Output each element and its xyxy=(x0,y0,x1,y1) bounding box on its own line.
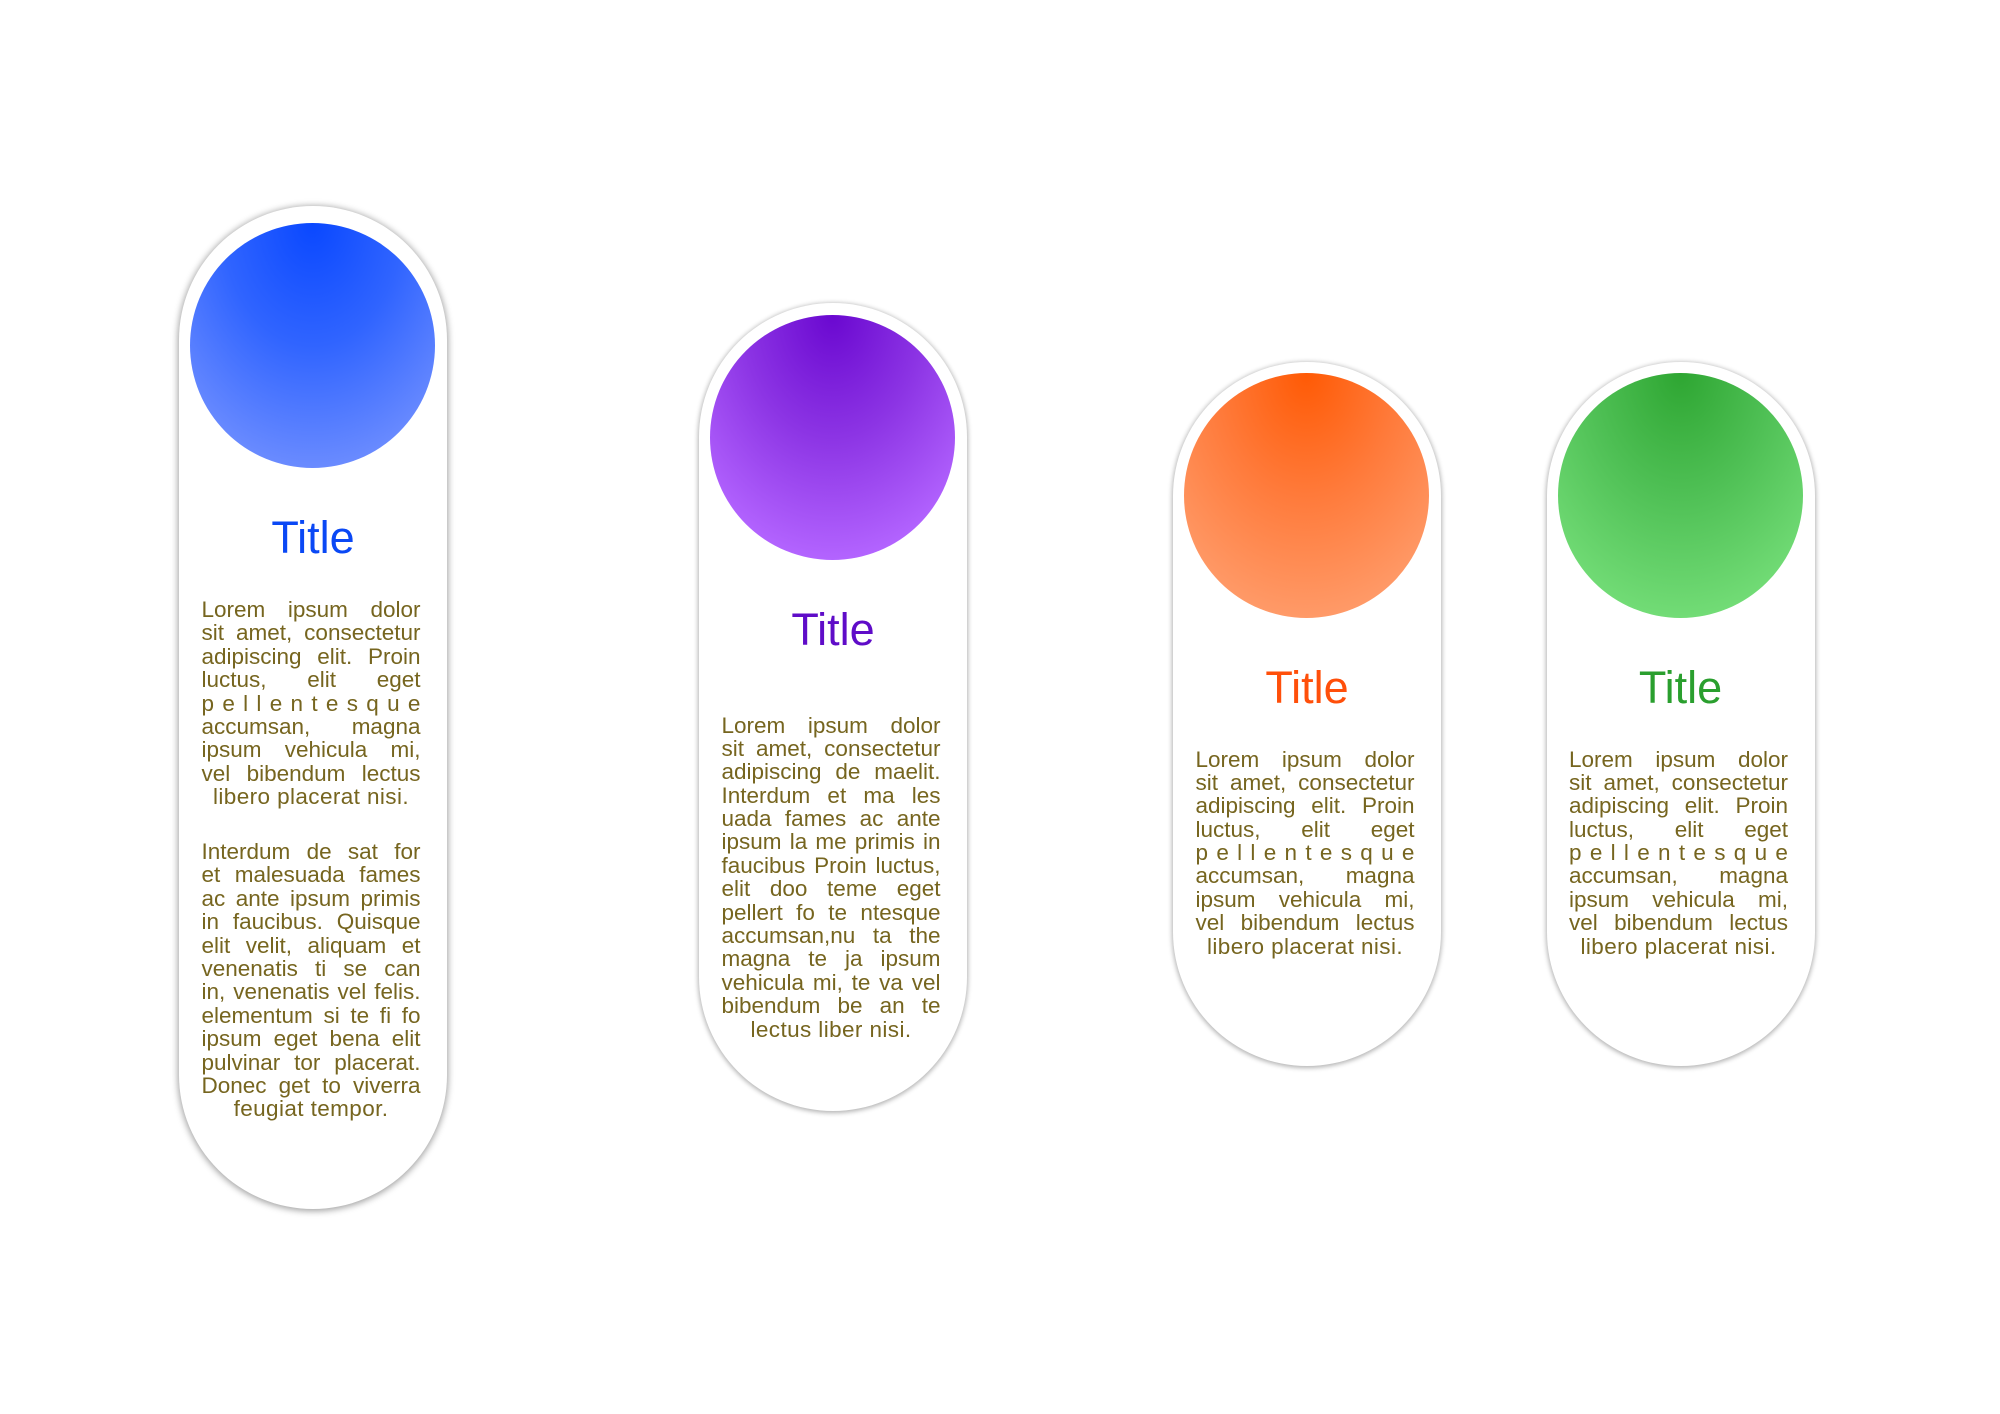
text block: blue card second paragraph: et malesuada fames xyxy=(202,862,420,887)
text block: blue card second paragraph: pulvinar tor placerat. xyxy=(202,1050,420,1075)
text block: green card paragraph xyxy=(1569,746,1796,959)
text block: green card paragraph: adipiscing elit. Proin xyxy=(1569,793,1788,818)
text block: purple card paragraph: lectus liber nisi. xyxy=(750,1017,912,1042)
text block: purple card paragraph: sit amet, consectetur xyxy=(722,736,940,761)
text block: purple card paragraph: bibendum be an te xyxy=(722,993,940,1018)
text block: blue card first paragraph: pellentesque xyxy=(202,691,429,716)
text block: green card paragraph: pellentesque xyxy=(1569,840,1796,865)
text block: orange card paragraph: ipsum vehicula mi, xyxy=(1196,887,1414,912)
panel: blue card xyxy=(179,206,447,1209)
panel: green card xyxy=(1546,362,1814,1066)
heading: purple title: Title xyxy=(791,604,875,655)
text block: blue card first paragraph: libero placerat nisi. xyxy=(213,784,409,809)
text block: orange card paragraph: Lorem ipsum dolor xyxy=(1196,746,1414,772)
text block: blue card second paragraph: ipsum eget bena elit xyxy=(202,1026,420,1051)
text block: purple card paragraph: ipsum la me primis in xyxy=(722,829,940,854)
text block: purple card paragraph xyxy=(722,712,940,1042)
text block: purple card paragraph: uada fames ac ante xyxy=(722,806,940,831)
text block: blue card first paragraph: sit amet, consectetur xyxy=(202,620,420,645)
text block: blue card first paragraph: ipsum vehicula mi, xyxy=(202,737,420,762)
text block: orange card paragraph: luctus, elit eget xyxy=(1196,817,1414,842)
text block: orange card paragraph: libero placerat nisi. xyxy=(1207,934,1403,959)
text block: purple card paragraph: magna te ja ipsum xyxy=(722,946,940,971)
text block: orange card paragraph: vel bibendum lectus xyxy=(1196,910,1414,935)
text block: green card paragraph: Lorem ipsum dolor xyxy=(1569,746,1788,772)
text block: blue card first paragraph: Lorem ipsum dolor xyxy=(202,597,420,622)
text block: blue card second paragraph: Interdum de sat for xyxy=(202,839,420,864)
text block: purple card paragraph: accumsan,nu ta the xyxy=(722,923,940,948)
text block: purple card paragraph: vehicula mi, te va vel xyxy=(722,970,940,995)
text block: green card paragraph: accumsan, magna xyxy=(1569,863,1788,888)
panel: purple card xyxy=(699,303,967,1111)
text block: purple card paragraph: Interdum et ma les xyxy=(722,783,940,808)
text block: green card paragraph: libero placerat nisi. xyxy=(1580,934,1776,959)
text block: blue card second paragraph: venenatis ti se can xyxy=(202,956,420,981)
panel: orange card xyxy=(1173,362,1441,1066)
text block: green card paragraph: luctus, elit eget xyxy=(1569,817,1788,842)
text block: blue card second paragraph: elementum si te fi fo xyxy=(202,1003,420,1028)
text block: blue card second paragraph: Donec get to viverra xyxy=(202,1073,420,1098)
text block: blue card second paragraph: ac ante ipsum primis xyxy=(202,886,420,911)
text block: blue card second paragraph xyxy=(202,839,420,1121)
text block: blue card second paragraph: in faucibus. Quisque xyxy=(202,909,420,934)
text block: purple card paragraph: pellert fo te ntesque xyxy=(722,900,940,925)
text block: blue card second paragraph: in, venenatis vel felis. xyxy=(202,979,420,1004)
text block: blue card second paragraph: elit velit, aliquam et xyxy=(202,933,420,958)
text block: purple card paragraph: elit doo teme eget xyxy=(722,876,940,901)
icon: purple gradient circle xyxy=(710,315,955,560)
heading: orange title: Title xyxy=(1265,662,1349,713)
icon: orange gradient circle xyxy=(1184,373,1429,618)
text block: green card paragraph: sit amet, consectetur xyxy=(1569,770,1788,795)
text block: orange card paragraph: accumsan, magna xyxy=(1196,863,1414,888)
text block: blue card first paragraph xyxy=(202,597,429,809)
text block: orange card paragraph: sit amet, consectetur xyxy=(1196,770,1414,795)
text block: blue card first paragraph: luctus, elit eget xyxy=(202,667,420,692)
text block: blue card second paragraph: feugiat tempor. xyxy=(234,1096,388,1121)
text block: orange card paragraph: pellentesque xyxy=(1196,840,1423,865)
heading: blue title: Title xyxy=(271,512,355,563)
text block: green card paragraph: ipsum vehicula mi, xyxy=(1569,887,1788,912)
text block: purple card paragraph: faucibus Proin luctus, xyxy=(722,853,940,878)
text block: orange card paragraph xyxy=(1196,746,1423,959)
text block: orange card paragraph: adipiscing elit. Proin xyxy=(1196,793,1414,818)
text block: purple card paragraph: adipiscing de maelit. xyxy=(722,759,940,784)
text block: blue card first paragraph: accumsan, magna xyxy=(202,714,420,739)
text block: green card paragraph: vel bibendum lectus xyxy=(1569,910,1788,935)
icon: green gradient circle xyxy=(1558,373,1802,618)
text block: purple card paragraph: Lorem ipsum dolor xyxy=(722,712,940,738)
text block: blue card first paragraph: vel bibendum lectus xyxy=(202,761,420,786)
heading: green title: Title xyxy=(1639,662,1722,713)
text block: blue card first paragraph: adipiscing elit. Proin xyxy=(202,644,420,669)
icon: blue gradient circle xyxy=(190,223,435,468)
